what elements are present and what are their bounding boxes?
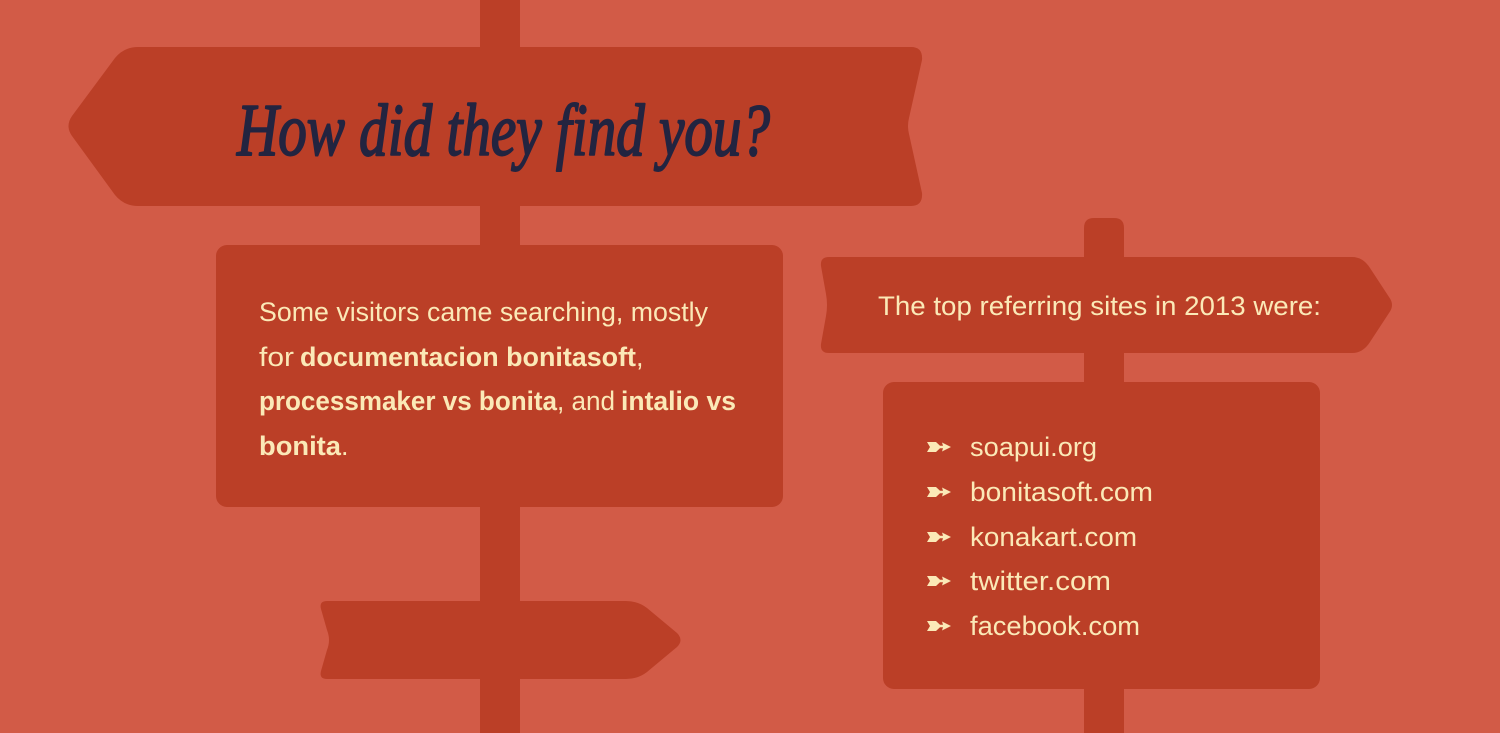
list item: facebook.com: facebook.com <box>970 611 1140 641</box>
panel: empty arrow sign <box>321 601 680 679</box>
text block: search terms: Some visitors came searching, mostly <box>259 297 708 327</box>
text: top referring sites heading: The top referring sites in 2013 were: <box>878 291 1321 321</box>
list item: soapui.org: soapui.org <box>970 432 1097 462</box>
text block: search terms: documentacion bonitasoft <box>300 342 636 372</box>
panel: referring sites list <box>883 382 1320 689</box>
panel: top referring sites arrow sign <box>821 257 1392 353</box>
text block: search terms <box>259 297 736 461</box>
panel: search terms text box <box>216 245 783 507</box>
title: How did they find you? <box>236 90 770 172</box>
signpost: left post <box>480 0 520 733</box>
text block: search terms: intalio vs <box>621 386 736 416</box>
text block: search terms: bonita <box>259 431 342 461</box>
panel: title arrow sign <box>68 47 922 206</box>
text block: search terms: processmaker vs bonita <box>259 386 558 416</box>
list item: twitter.com: twitter.com <box>970 566 1111 596</box>
text block: search terms: . <box>341 431 349 461</box>
text block: search terms: , <box>636 342 644 372</box>
list item: konakart.com: konakart.com <box>970 522 1137 552</box>
text block: search terms: for <box>259 342 294 372</box>
text block: search terms: , and <box>557 386 615 416</box>
list item: bonitasoft.com: bonitasoft.com <box>970 477 1153 507</box>
signpost: right post <box>1084 218 1124 733</box>
